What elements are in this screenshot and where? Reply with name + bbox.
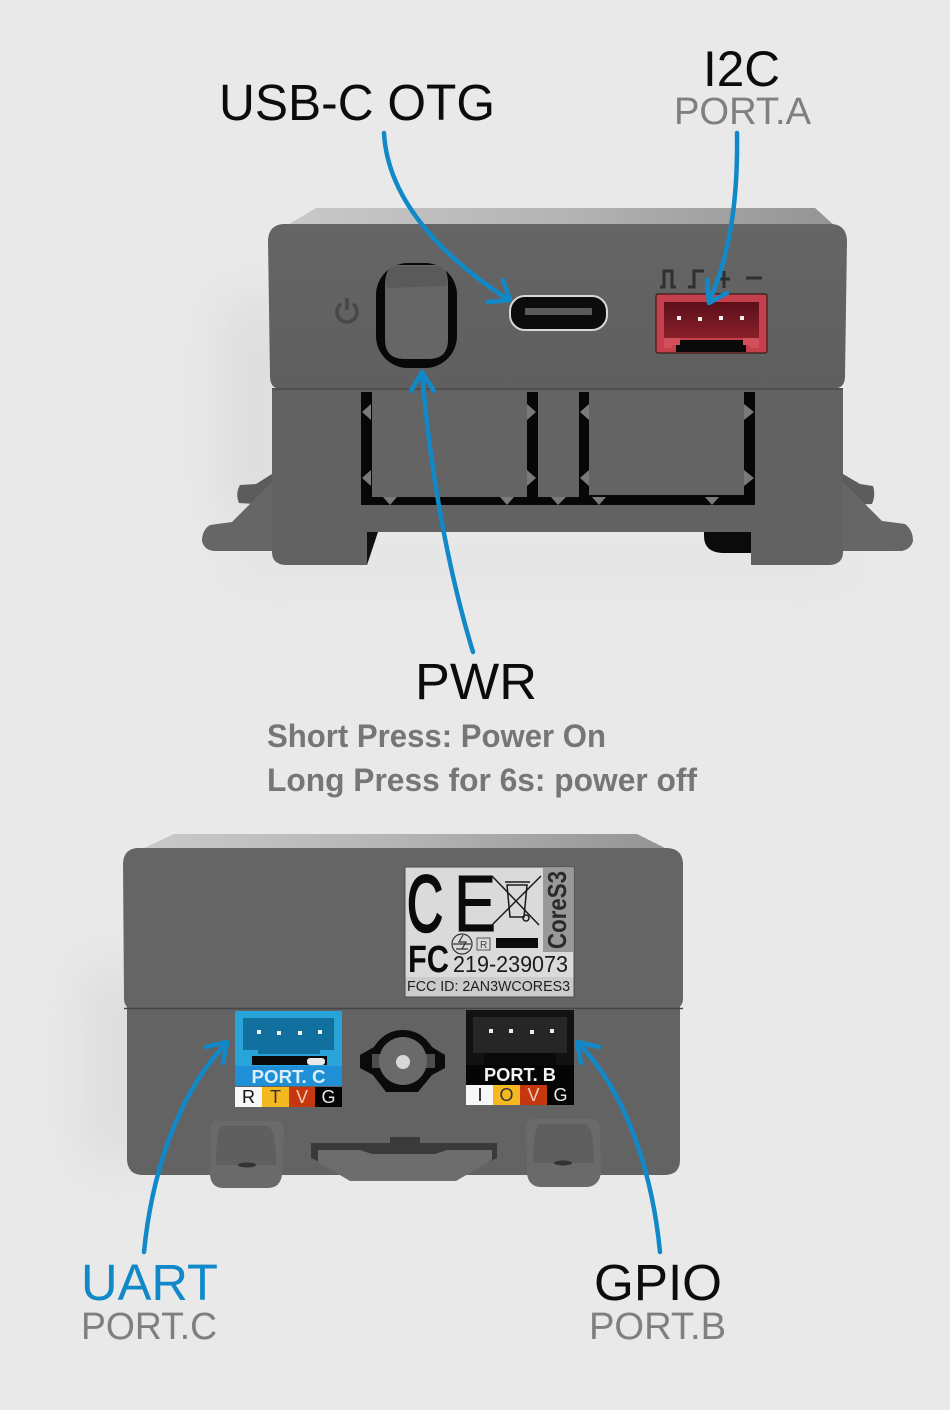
pin V: V (296, 1087, 308, 1107)
subheading: PORT.A: PORT.A (674, 91, 812, 133)
lid (123, 848, 683, 1008)
port cavity (473, 1017, 567, 1053)
screw (238, 1162, 256, 1168)
button highlight (386, 266, 447, 288)
port notch (676, 340, 746, 352)
CE mark C: C (407, 859, 443, 948)
middle slot panel (538, 392, 579, 497)
right mounting tab (526, 1119, 601, 1187)
port cavity (243, 1018, 334, 1054)
CoreS3 text: CoreS3 (542, 871, 572, 949)
FCC ID strip (406, 977, 574, 996)
soft shadows (85, 300, 850, 1160)
right slot panel (589, 392, 744, 495)
radio mark (452, 934, 472, 954)
port tongue (525, 308, 592, 315)
blue port C (235, 1011, 342, 1107)
slot fill (372, 1054, 435, 1068)
port notch (484, 1053, 556, 1065)
redaction bar (496, 938, 538, 948)
clip shadow (311, 1137, 497, 1176)
button cap (385, 265, 448, 359)
port pins (677, 316, 744, 321)
hub (379, 1037, 427, 1085)
top face of lid (286, 208, 835, 226)
arrow: I2C (707, 133, 737, 303)
subheading: PORT.C: PORT.C (81, 1306, 217, 1348)
port rim (510, 296, 607, 330)
top face of lid (142, 834, 667, 849)
port hooks (664, 338, 759, 348)
PORT.B bar (466, 1065, 574, 1085)
lid seam (272, 388, 843, 390)
FC logo: FC (408, 939, 449, 981)
port notch (252, 1056, 327, 1065)
power button (376, 263, 457, 368)
PORT.C label: PORT. C (252, 1067, 326, 1087)
tab recess (533, 1124, 594, 1163)
port housing (656, 294, 767, 353)
dark slots in shell (361, 392, 755, 505)
label background (405, 867, 574, 997)
underside shadow right (704, 532, 751, 553)
slot teeth (362, 404, 754, 505)
red I2C port (656, 294, 767, 353)
subheading: PORT.B: PORT.B (589, 1306, 726, 1348)
pin V: V (527, 1085, 540, 1105)
screw (554, 1160, 572, 1166)
button recess (376, 263, 457, 368)
left slot panel (372, 392, 527, 497)
reflection (307, 1058, 325, 1065)
lower shell (272, 388, 843, 565)
clip body (318, 1150, 492, 1181)
rear left foot (237, 474, 272, 505)
arrow: GPIO (577, 1042, 660, 1252)
port pins (489, 1029, 554, 1034)
port housing (466, 1010, 574, 1065)
port pins (257, 1030, 322, 1035)
heading: I2C: I2C (703, 41, 780, 97)
left mounting tab (210, 1121, 284, 1188)
heading: UART: UART (81, 1254, 218, 1311)
heading: GPIO: GPIO (594, 1254, 722, 1311)
center clip (311, 1137, 497, 1181)
PWR note line 1: Short Press: Power On (267, 718, 606, 754)
hole outline (360, 1030, 445, 1092)
pin O: O (499, 1085, 514, 1105)
lid seam (124, 1008, 683, 1010)
PORT.C bar (235, 1066, 342, 1086)
FCC ID text: FCC ID: 2AN3WCORES3 (407, 979, 570, 995)
CE mark E: E (454, 859, 496, 948)
lower shell (127, 1006, 680, 1175)
port hooks (243, 1050, 334, 1062)
top device: front view (202, 208, 913, 565)
polarity marks (660, 271, 762, 288)
rear right foot (843, 474, 874, 505)
certification number: 219-239073 (453, 951, 568, 977)
lid (268, 224, 847, 388)
pin G: G (553, 1085, 568, 1105)
CoreS3 block (543, 868, 573, 952)
port housing (235, 1011, 342, 1066)
pin T: T (270, 1087, 281, 1107)
PWR note line 2: Long Press for 6s: power off (267, 762, 697, 798)
crossed-out bin icon (492, 876, 541, 925)
port cavity (664, 302, 759, 338)
R box (477, 938, 490, 950)
USB-C port (510, 296, 607, 330)
power icon (337, 298, 357, 322)
compliance label (405, 859, 574, 997)
front left foot (202, 482, 272, 551)
center mount hole (360, 1030, 445, 1092)
arrow: PWR (411, 372, 473, 652)
black port B (466, 1010, 574, 1105)
hub center (396, 1055, 410, 1069)
R letter: R (480, 940, 487, 951)
pin I: I (477, 1085, 483, 1105)
heading: PWR: PWR (415, 653, 537, 710)
underside shadow left (367, 532, 378, 565)
front right foot (843, 482, 913, 551)
pin R: R (242, 1087, 255, 1107)
bottom device: back view (123, 834, 683, 1188)
arrow: UART (144, 1042, 227, 1252)
tab recess (216, 1126, 276, 1165)
pin G: G (321, 1087, 336, 1107)
PORT.B label: PORT. B (484, 1065, 556, 1085)
arrow: USB-C OTG (384, 133, 510, 302)
heading: USB-C OTG: USB-C OTG (219, 74, 495, 131)
